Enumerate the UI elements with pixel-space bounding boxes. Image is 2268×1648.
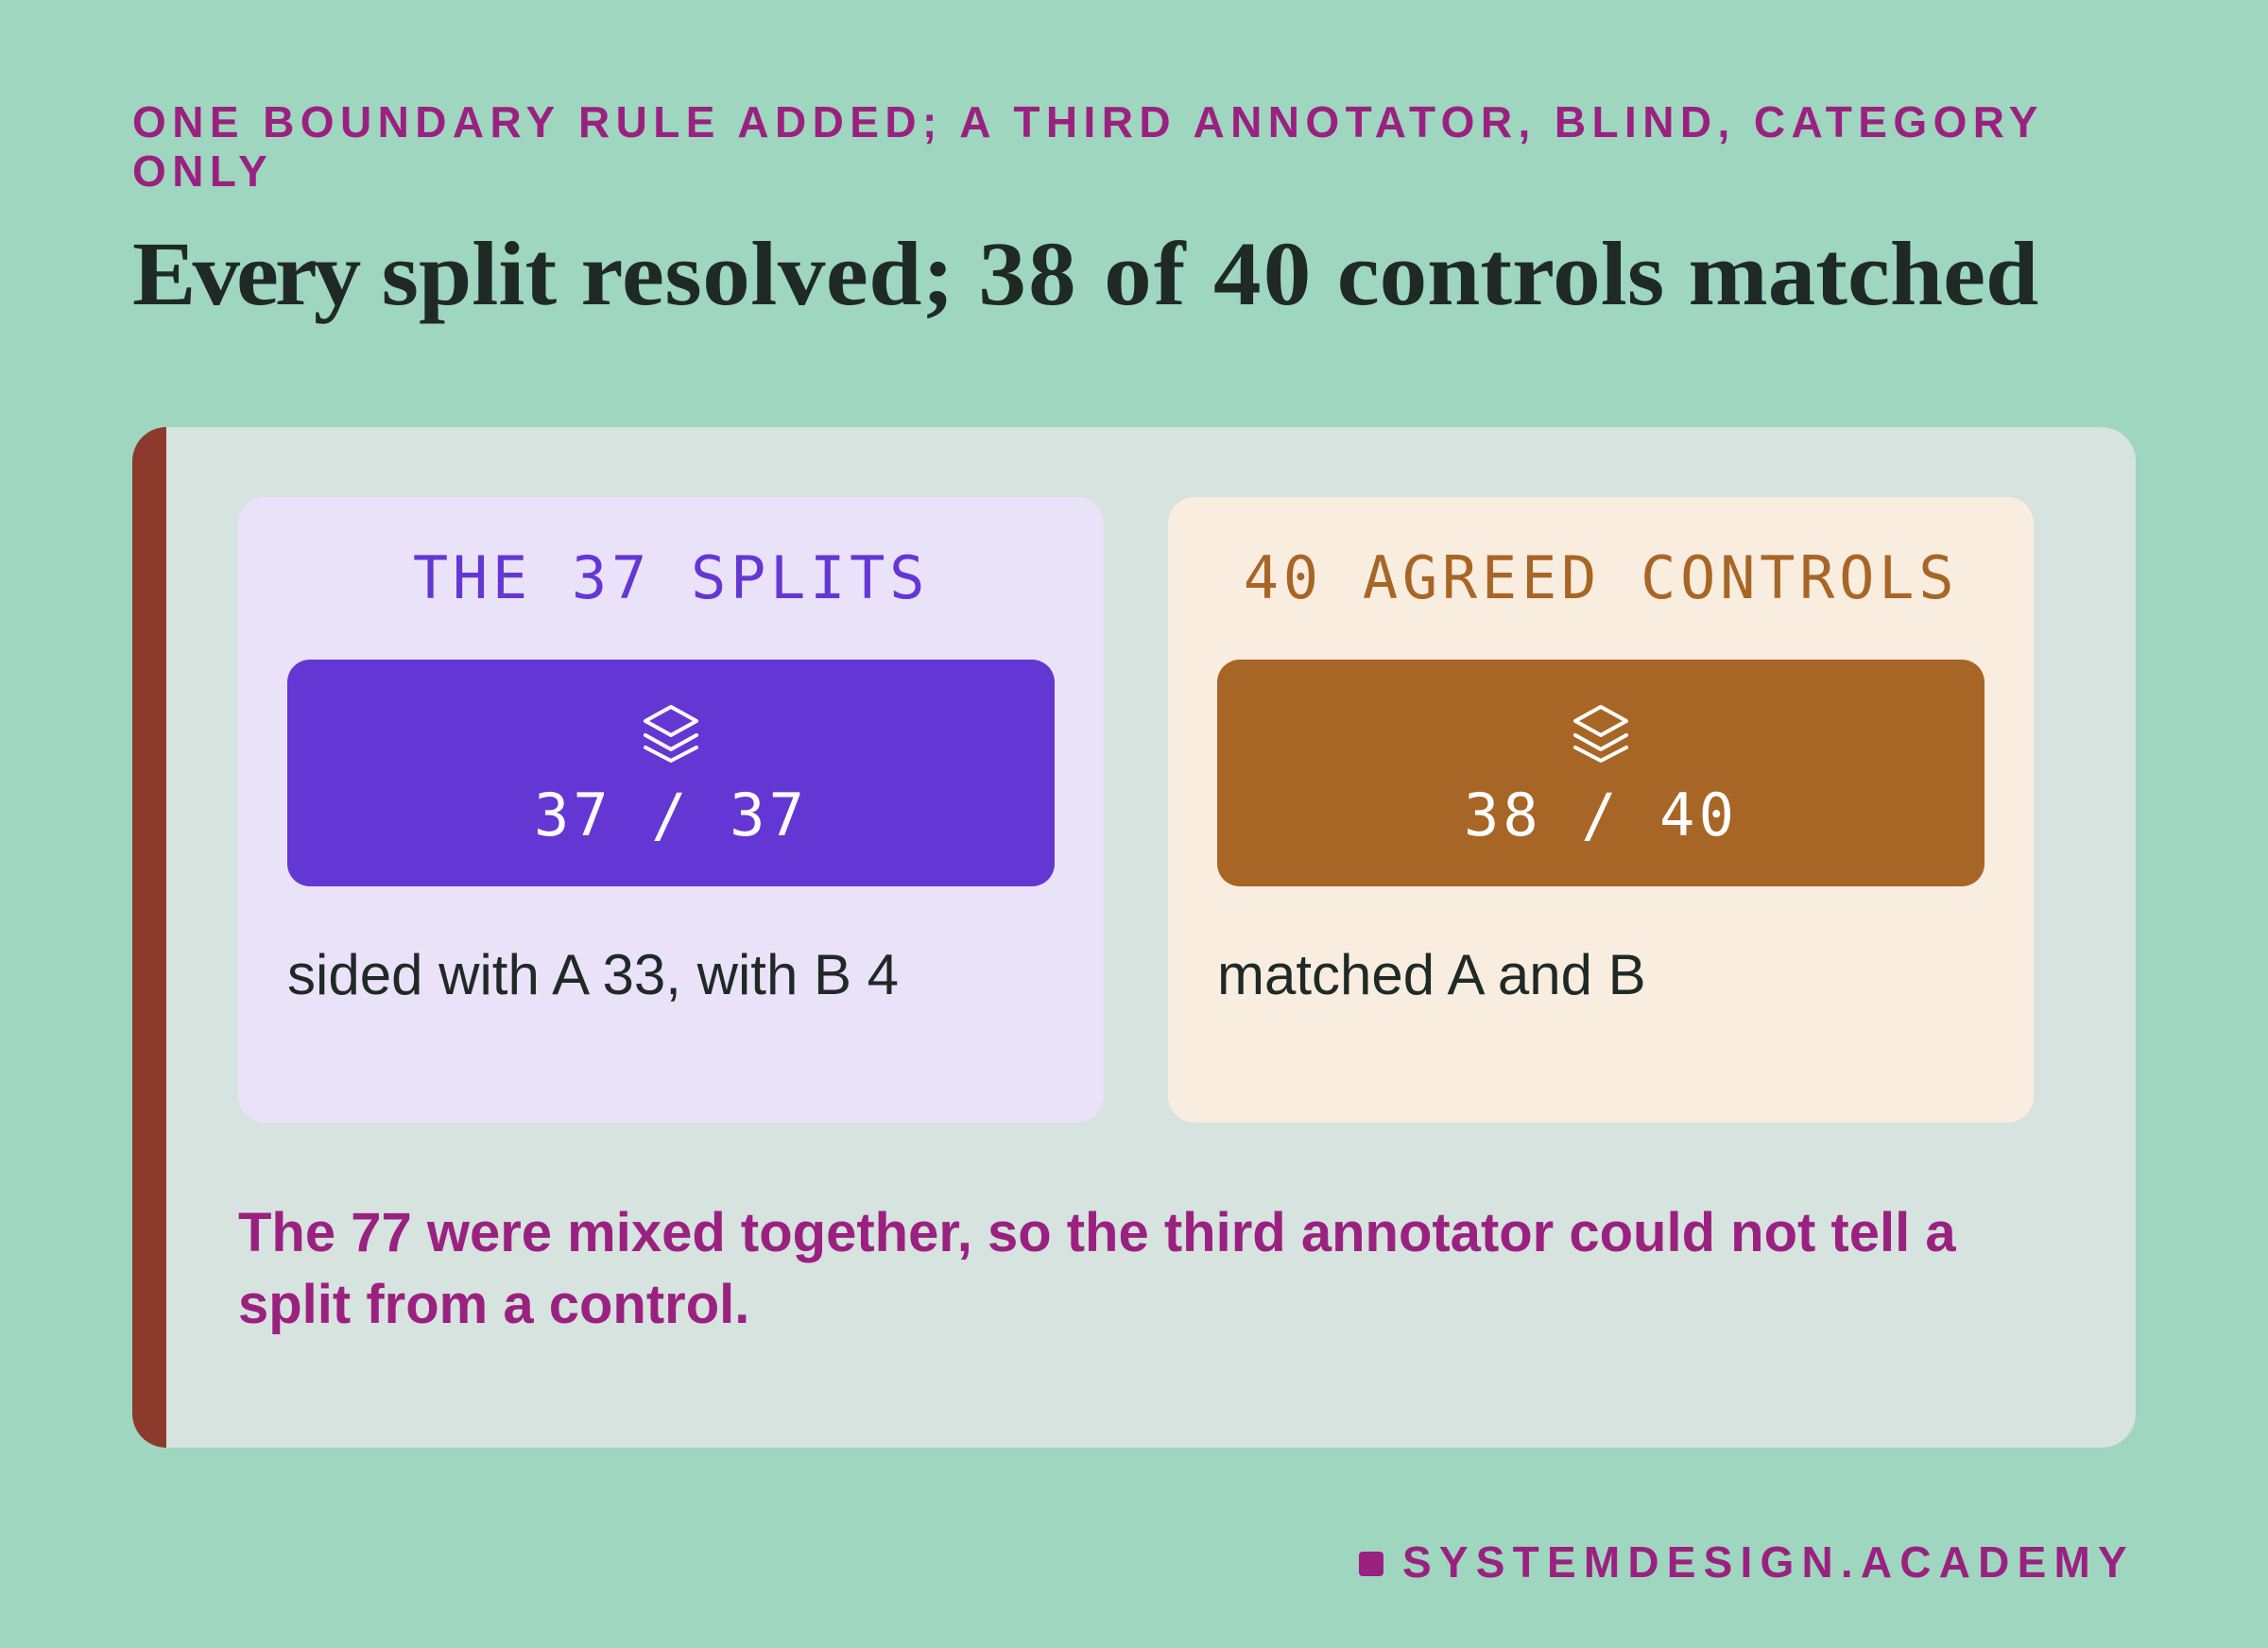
card: 40 agreed controls [1168,497,2034,1123]
brand mark [1359,1552,1383,1576]
card heading: controls: 40 AGREED CONTROLS [1244,543,1958,612]
card heading: splits: THE 37 SPLITS [413,543,929,612]
title: Every split resolved; 38 of 40 controls matched [132,223,2038,324]
accent bar [132,427,166,1448]
icon: layers [643,705,699,763]
card: the 37 splits [238,497,1104,1123]
stat box: 38 of 40 [1217,660,1984,886]
stat box: 37 of 37 [287,660,1055,886]
takeaway note: The 77 were mixed together, so the third annotator could not tell a split from a control. [238,1202,1956,1335]
stat value: 38 / 40 [1464,781,1738,850]
icon: layers [1572,705,1629,763]
card description: matched A and B [1217,943,1646,1006]
stat value: 37 / 37 [534,781,808,850]
eyebrow: ONE BOUNDARY RULE ADDED; A THIRD ANNOTATOR, BLIND, CATEGORY ONLY [132,97,2043,196]
panel: results [132,427,2136,1448]
card description: sided with A 33, with B 4 [287,943,899,1006]
brand name: SYSTEMDESIGN.ACADEMY [1402,1537,2135,1587]
